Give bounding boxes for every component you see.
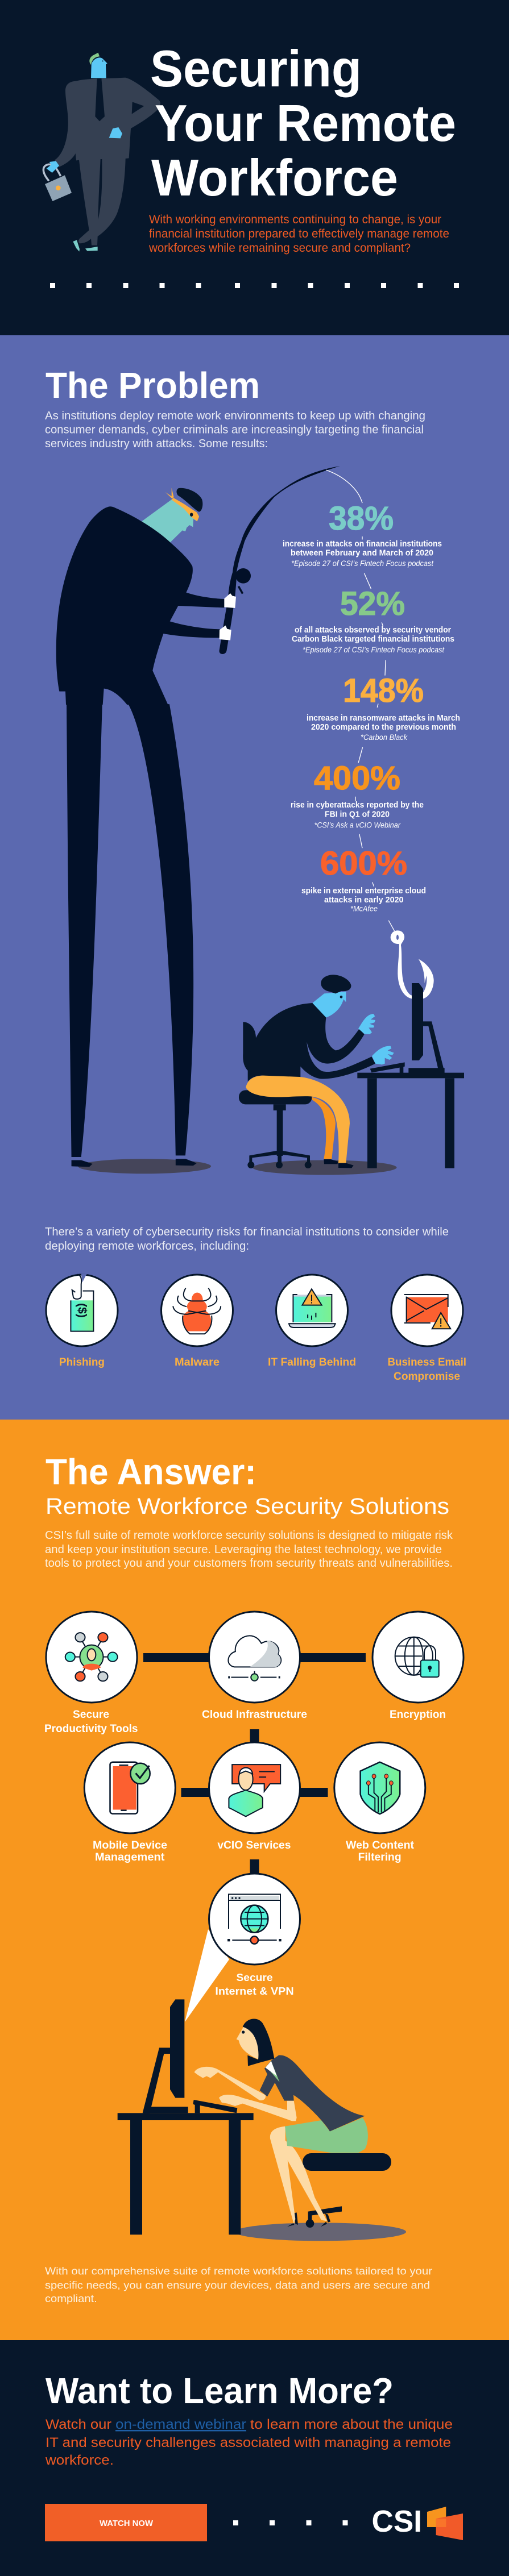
heading: The Answer: Remote Workforce Security Solutions	[45, 1494, 449, 1519]
button: watch now: WATCH NOW	[100, 2519, 154, 2528]
call to action text: workforce.	[45, 2453, 114, 2468]
problem intro text: services industry with attacks. Some results:	[45, 437, 268, 450]
stat: 38%: between February and March of 2020	[291, 549, 433, 558]
problem intro text: As institutions deploy remote work environments to keep up with changing	[45, 409, 425, 422]
title: Your Remote	[155, 95, 456, 152]
stat: 600%: spike in external enterprise cloud	[301, 887, 426, 896]
risk labels: Business Email	[388, 1356, 466, 1368]
risks intro text: deploying remote workforces, including:	[45, 1240, 249, 1252]
icon: cloud infrastructure	[209, 1612, 300, 1703]
icon: web content filtering	[334, 1742, 425, 1833]
solution labels: Filtering	[358, 1851, 402, 1863]
connectors between solutions	[143, 1653, 366, 1875]
solution labels: Productivity Tools	[44, 1722, 138, 1735]
stat: 148%: increase in ransomware attacks in March	[307, 714, 460, 723]
stat: 400%: FBI in Q1 of 2020	[325, 810, 390, 819]
heading: Want to Learn More: Want to Learn More?	[45, 2370, 394, 2411]
illustration: giant thief with fishing rod	[56, 466, 340, 1167]
risks intro text	[45, 1226, 449, 1252]
stat: 600%: attacks in early 2020	[324, 896, 404, 905]
risk labels: Compromise	[394, 1370, 460, 1383]
stat: 400%: 400%	[314, 760, 400, 797]
desk and monitor	[357, 983, 464, 1168]
illustration: fish hook and victim at desk	[239, 930, 464, 1168]
stat: 600%: 600%	[320, 845, 407, 882]
header intro text: With working environments continuing to change, is your	[149, 213, 441, 226]
solution labels: Encryption	[390, 1708, 446, 1721]
title: Workforce	[151, 149, 398, 207]
stat: 38%	[283, 500, 442, 568]
heading: The Answer: The Answer:	[45, 1451, 256, 1492]
icon: secure internet and VPN	[209, 1874, 300, 1965]
call to action text: IT and security challenges associated with managing a remote	[45, 2435, 451, 2450]
closing text: compliant.	[45, 2293, 97, 2304]
header intro text: financial institution prepared to effectively manage remote	[149, 227, 449, 240]
stat: 52%: Carbon Black targeted financial institutions	[292, 635, 454, 644]
stat: 600%	[301, 845, 426, 913]
stat: 52%	[292, 585, 454, 654]
solution labels: Secure	[73, 1708, 109, 1721]
stat: 38%: *Episode 27 of CSI’s Fintech Focus podcast	[291, 559, 434, 568]
answer intro text: and keep your institution secure. Leveraging the latest technology, we provide	[45, 1543, 442, 1556]
solution labels: Internet & VPN	[215, 1986, 294, 1997]
solution labels: Secure	[237, 1972, 273, 1983]
icon: encryption	[373, 1612, 464, 1703]
panel: want to learn more	[0, 2340, 509, 2576]
stat: 400%	[291, 760, 424, 830]
solution labels: vCIO Services	[217, 1839, 291, 1851]
illustration: businessman holding padlock	[43, 53, 160, 252]
answer intro text: CSI’s full suite of remote workforce security solutions is designed to mitigate risk	[45, 1529, 453, 1542]
risk labels	[59, 1356, 466, 1383]
answer intro text: tools to protect you and your customers from security threats and vulnerabilities.	[45, 1557, 453, 1570]
stat: 38%: increase in attacks on financial institutions	[283, 540, 442, 549]
closing text	[45, 2266, 432, 2304]
closing text: With our comprehensive suite of remote workforce solutions tailored to your	[45, 2266, 432, 2277]
panel: header	[0, 0, 509, 335]
logo: CSI: CSI	[372, 2504, 422, 2538]
solution labels: Web Content	[346, 1839, 414, 1851]
stat: 148%: 2020 compared to the previous month	[311, 723, 456, 732]
stat: 148%: *Carbon Black	[361, 733, 408, 742]
logo: CSI	[372, 2504, 463, 2540]
stat: 400%: rise in cyberattacks reported by the	[291, 801, 424, 810]
problem intro text	[45, 409, 425, 450]
panel: the answer	[0, 1420, 509, 2340]
speech cone from monitor	[185, 1929, 229, 2022]
panel: the problem	[0, 335, 509, 1420]
solution labels: Cloud Infrastructure	[202, 1708, 307, 1721]
icon: mobile device management	[84, 1742, 175, 1833]
heading: The Answer	[45, 1451, 449, 1519]
heading: The Problem: The Problem	[45, 365, 260, 406]
icon: malware	[162, 1275, 233, 1346]
solution labels: Management	[95, 1851, 165, 1863]
stat: 600%: *McAfee	[350, 905, 378, 913]
header intro text: workforces while remaining secure and compliant?	[148, 242, 411, 255]
risk labels: Malware	[175, 1356, 220, 1368]
stat: 400%: *CSI’s Ask a vCIO Webinar	[314, 821, 400, 830]
title: Securing	[150, 40, 362, 98]
call to action text: on-demand webinar	[115, 2417, 246, 2432]
answer intro text	[45, 1529, 453, 1570]
stat: 148%: 148%	[343, 672, 424, 709]
illustration: woman at computer	[118, 1999, 406, 2241]
risks intro text: There’s a variety of cybersecurity risks for financial institutions to consider while	[45, 1226, 449, 1238]
icon: phishing: ($)	[75, 1303, 89, 1318]
call to action text: Watch our	[45, 2417, 111, 2432]
fishing line	[326, 470, 395, 931]
call to action text	[45, 2417, 453, 2468]
chair	[239, 1022, 312, 1168]
title	[150, 40, 456, 207]
figure	[312, 1097, 336, 1159]
header intro text	[148, 213, 449, 255]
icon: phishing	[46, 1274, 118, 1346]
risk labels: Phishing	[59, 1356, 105, 1368]
stat: 38%: 38%	[329, 500, 394, 537]
solution labels	[44, 1708, 446, 1997]
risk labels: IT Falling Behind	[268, 1356, 356, 1368]
problem intro text: consumer demands, cyber criminals are increasingly targeting the financial	[45, 423, 424, 436]
stat: 52%: *Episode 27 of CSI’s Fintech Focus podcast	[303, 646, 445, 654]
stat: 52%: of all attacks observed by security vendor	[295, 626, 451, 635]
call to action text: to learn more about the unique	[250, 2417, 453, 2432]
stat: 148%	[307, 672, 460, 742]
stat: 52%: 52%	[340, 585, 405, 622]
icon: IT falling behind	[276, 1275, 348, 1346]
icon: secure productivity tools	[46, 1612, 137, 1703]
illustration: shadows under figures	[78, 1159, 397, 1175]
icon: vCIO services	[209, 1742, 300, 1833]
solution labels: Mobile Device	[93, 1839, 167, 1851]
closing text: specific needs, you can ensure your devices, data and users are secure and	[45, 2280, 430, 2291]
icon: business email compromise	[391, 1275, 463, 1346]
button: watch now	[45, 2504, 207, 2541]
